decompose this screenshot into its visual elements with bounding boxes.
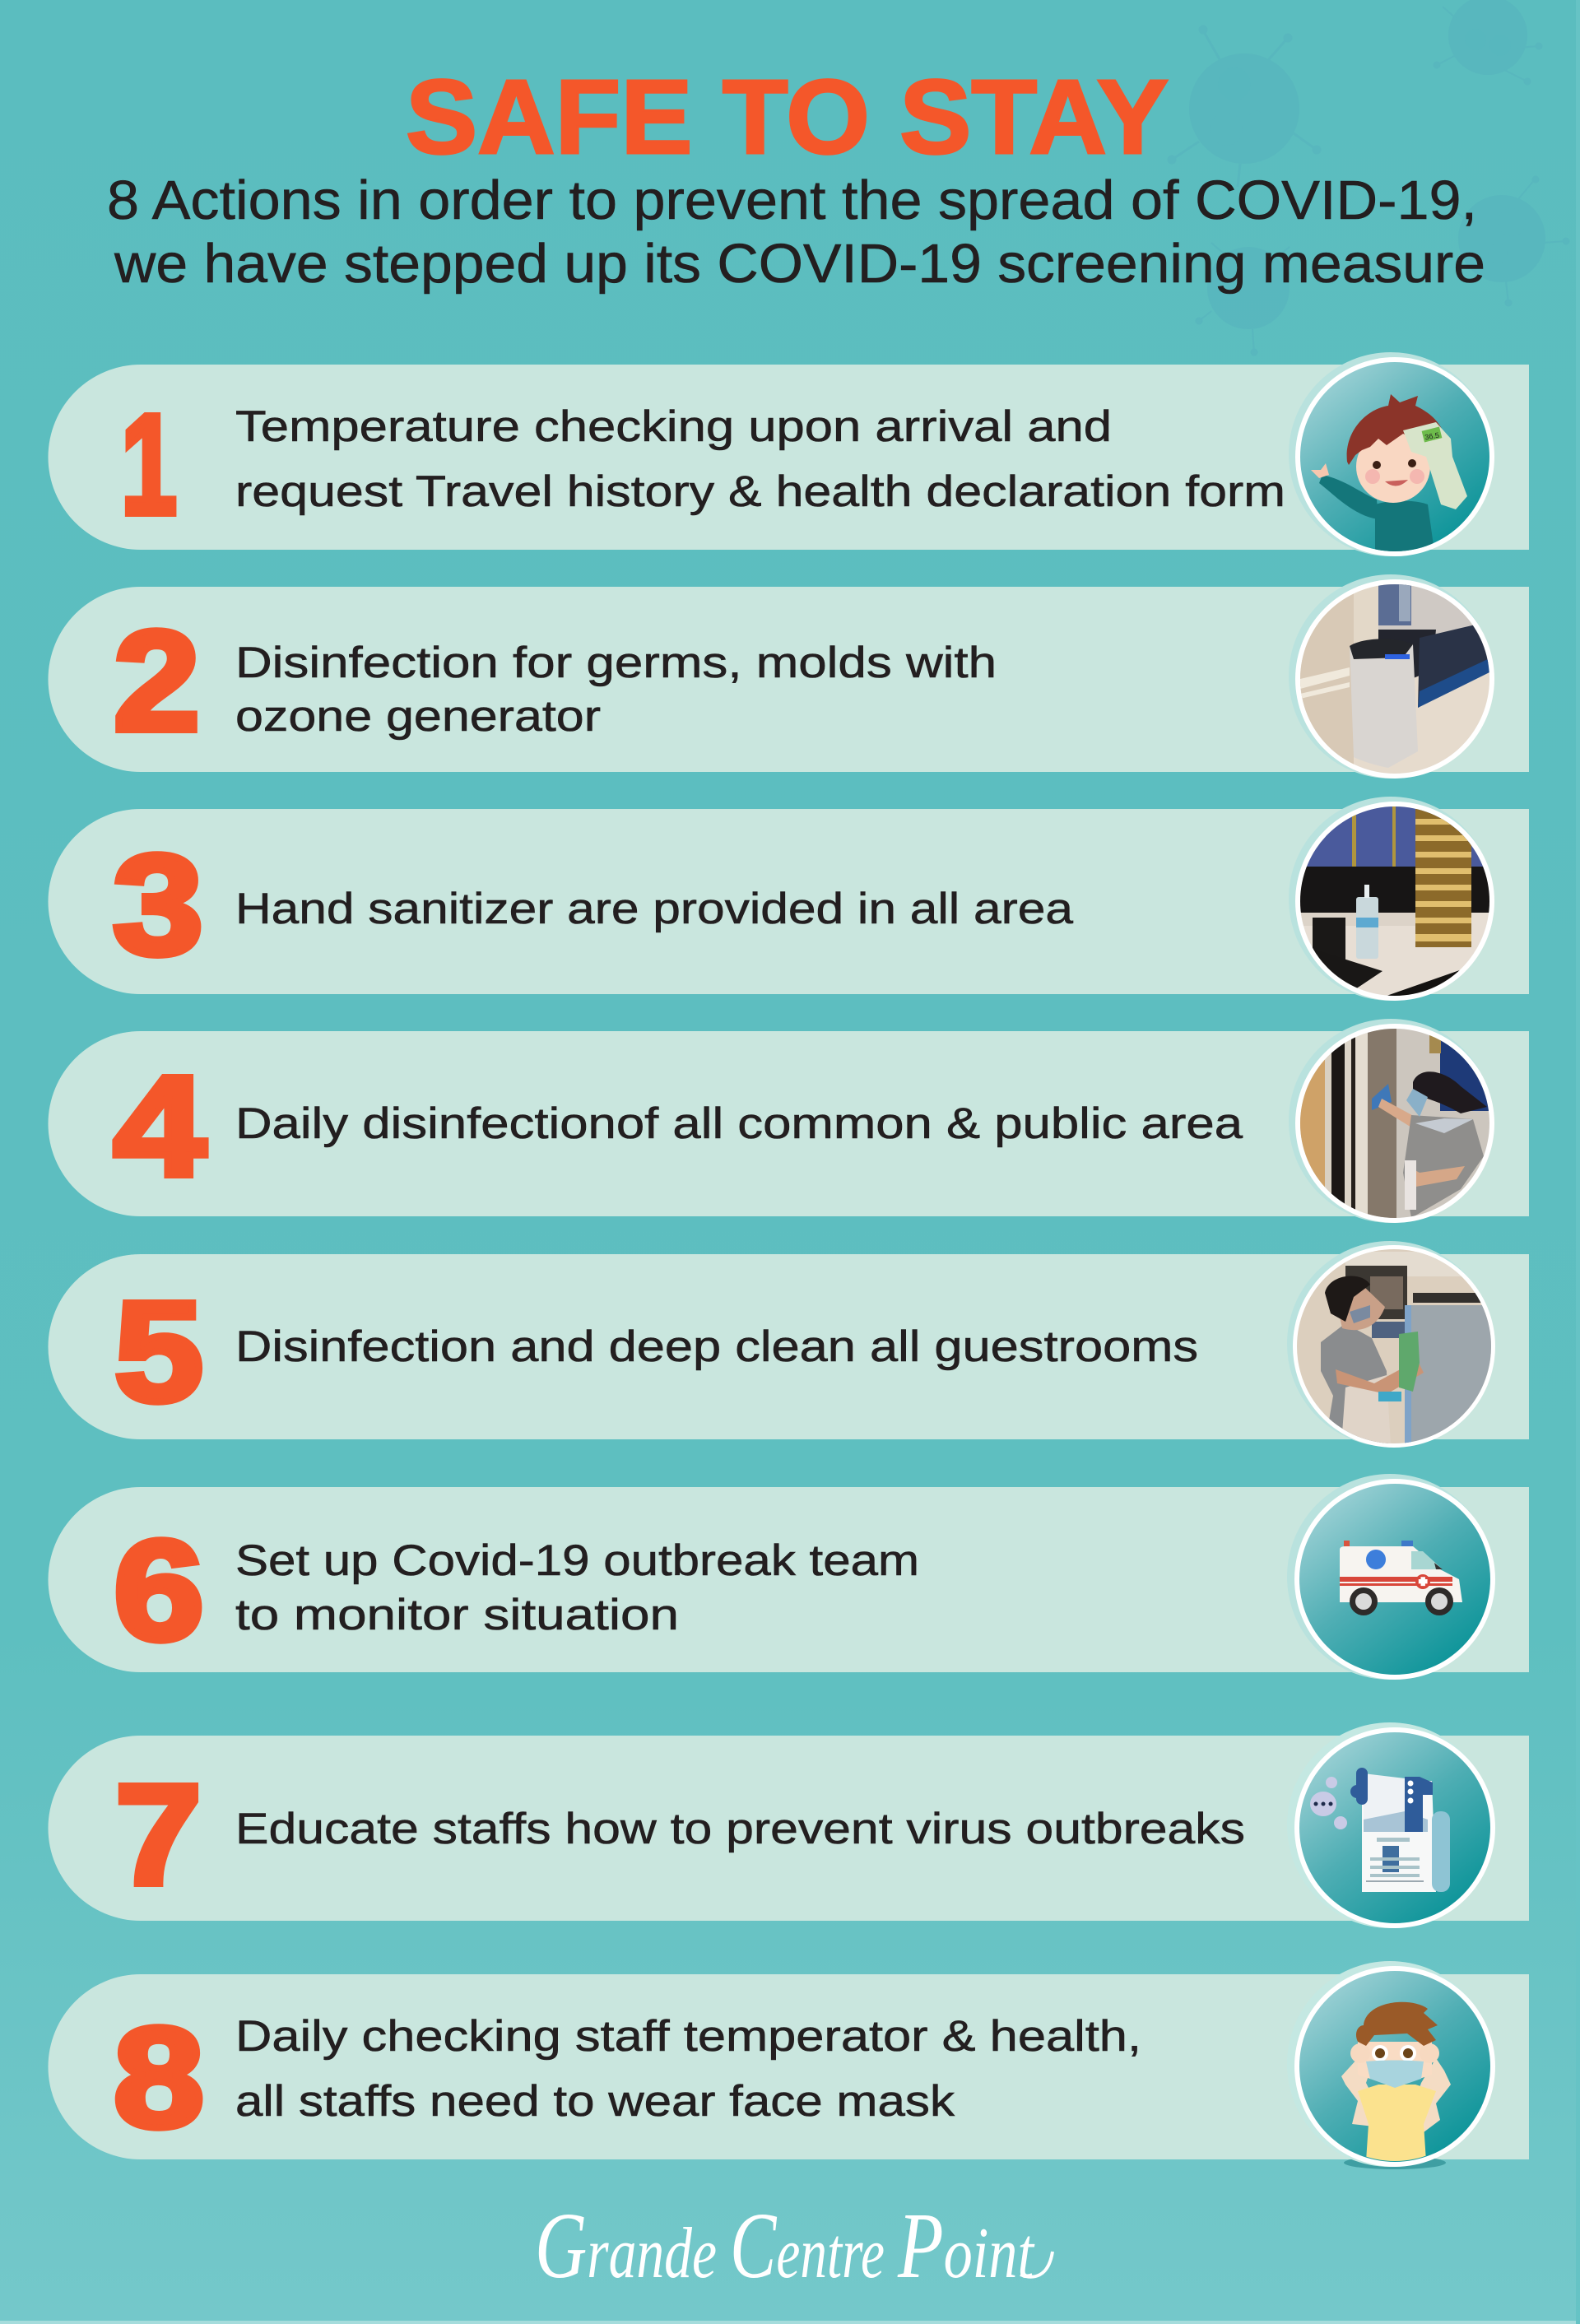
number 7: 7: [115, 1755, 202, 1914]
text 5: Disinfection and deep clean all guestrooms: [235, 1322, 1198, 1371]
photo: cleaning elevator: [1289, 1019, 1494, 1223]
text 1: Temperature checking upon arrival and: [235, 402, 1112, 451]
number 5: 5: [114, 1271, 203, 1431]
subtitle: 8 Actions in order to prevent the spread of COVID-19,: [107, 170, 1477, 231]
text 8: all staffs need to wear face mask: [235, 2077, 955, 2126]
photo: hand sanitizer: [1289, 797, 1494, 1001]
icon: boy with thermometer: 36.5: [1424, 431, 1440, 441]
logo: Grande Centre Point: [535, 2193, 1053, 2298]
number 2: 2: [114, 601, 200, 760]
title: SAFE TO STAY: [406, 58, 1169, 176]
number 4: 4: [114, 1046, 206, 1206]
text 7: Educate staffs how to prevent virus outbreaks: [235, 1805, 1245, 1853]
number 6: 6: [114, 1510, 204, 1670]
text 8: Daily checking staff temperator & health,: [235, 2012, 1141, 2061]
subtitle: [107, 170, 1485, 295]
text 2: ozone generator: [235, 692, 601, 741]
virus top centre: [1168, 26, 1321, 187]
text 4: Daily disinfectionof all common & public area: [235, 1099, 1243, 1148]
panel: action 6: [48, 1474, 1529, 1680]
icon: ambulance: [1287, 1474, 1495, 1680]
subtitle: we have stepped up its COVID-19 screening measure: [114, 233, 1485, 295]
virus below subtitle: [1196, 243, 1290, 356]
icon: boy wearing face mask: [1287, 1961, 1495, 2169]
text 6: to monitor situation: [235, 1591, 679, 1639]
logo: Grande Centre Point: Centre: [730, 2193, 885, 2298]
panel: action 8: [48, 1961, 1529, 2169]
text 1: [235, 402, 1285, 516]
virus right: [1452, 176, 1569, 306]
icon: boy with thermometer: [1289, 352, 1494, 556]
number 8: 8: [114, 1997, 204, 2157]
text 2: [235, 639, 997, 741]
background virus illustrations: [1168, 0, 1569, 356]
photo: cleaning guestroom: [1287, 1241, 1495, 1448]
panel: action 5: [48, 1241, 1529, 1448]
number 1: 1: [121, 384, 177, 544]
text 6: Set up Covid-19 outbreak team: [235, 1536, 919, 1585]
text 2: Disinfection for germs, molds with: [235, 639, 997, 687]
text 8: [235, 2012, 1141, 2126]
icon: staff education document: [1287, 1722, 1495, 1928]
virus top right: [1434, 0, 1542, 85]
text 3: Hand sanitizer are provided in all area: [235, 885, 1074, 933]
panel: action 2: [48, 574, 1529, 779]
logo: Grande Centre Point: Point: [897, 2193, 1035, 2298]
panel: action 7: [48, 1722, 1529, 1928]
panel: action 4: [48, 1019, 1529, 1223]
panel: action 1: [48, 352, 1529, 556]
photo: ozone generator: [1289, 574, 1494, 779]
logo: Grande Centre Point: Grande: [535, 2193, 717, 2298]
number 3: 3: [113, 825, 203, 984]
panel: action 3: [48, 797, 1529, 1001]
text 6: [235, 1536, 919, 1639]
text 1: request Travel history & health declaration form: [235, 467, 1285, 516]
